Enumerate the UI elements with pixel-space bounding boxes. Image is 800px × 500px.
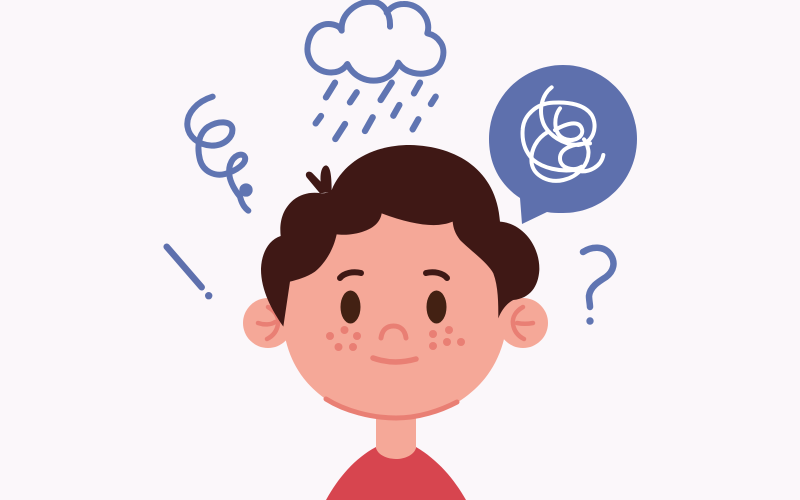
tangled scribble (523, 87, 603, 181)
face (283, 205, 508, 419)
neck (376, 410, 416, 459)
hair (261, 145, 539, 327)
right ear (498, 298, 548, 348)
nose (381, 326, 406, 338)
left freckles (326, 326, 361, 351)
left ear (243, 298, 293, 348)
shirt (326, 447, 466, 500)
icon: question mark (583, 248, 613, 325)
icon: spiral squiggle (187, 97, 253, 211)
right freckles (429, 326, 465, 350)
hair mass (261, 145, 539, 327)
right eye (426, 290, 446, 324)
right eyebrow (426, 272, 447, 278)
speech bubble (489, 65, 637, 224)
mouth (373, 358, 416, 362)
left eyebrow (340, 272, 361, 278)
icon: exclamation mark (167, 247, 212, 299)
cloud outline (308, 2, 443, 81)
chin line (326, 399, 457, 418)
icon: rain cloud (308, 2, 443, 139)
left eye (340, 290, 360, 324)
bubble shape (489, 65, 637, 224)
raindrops (316, 83, 436, 139)
hair tuft (306, 165, 332, 193)
